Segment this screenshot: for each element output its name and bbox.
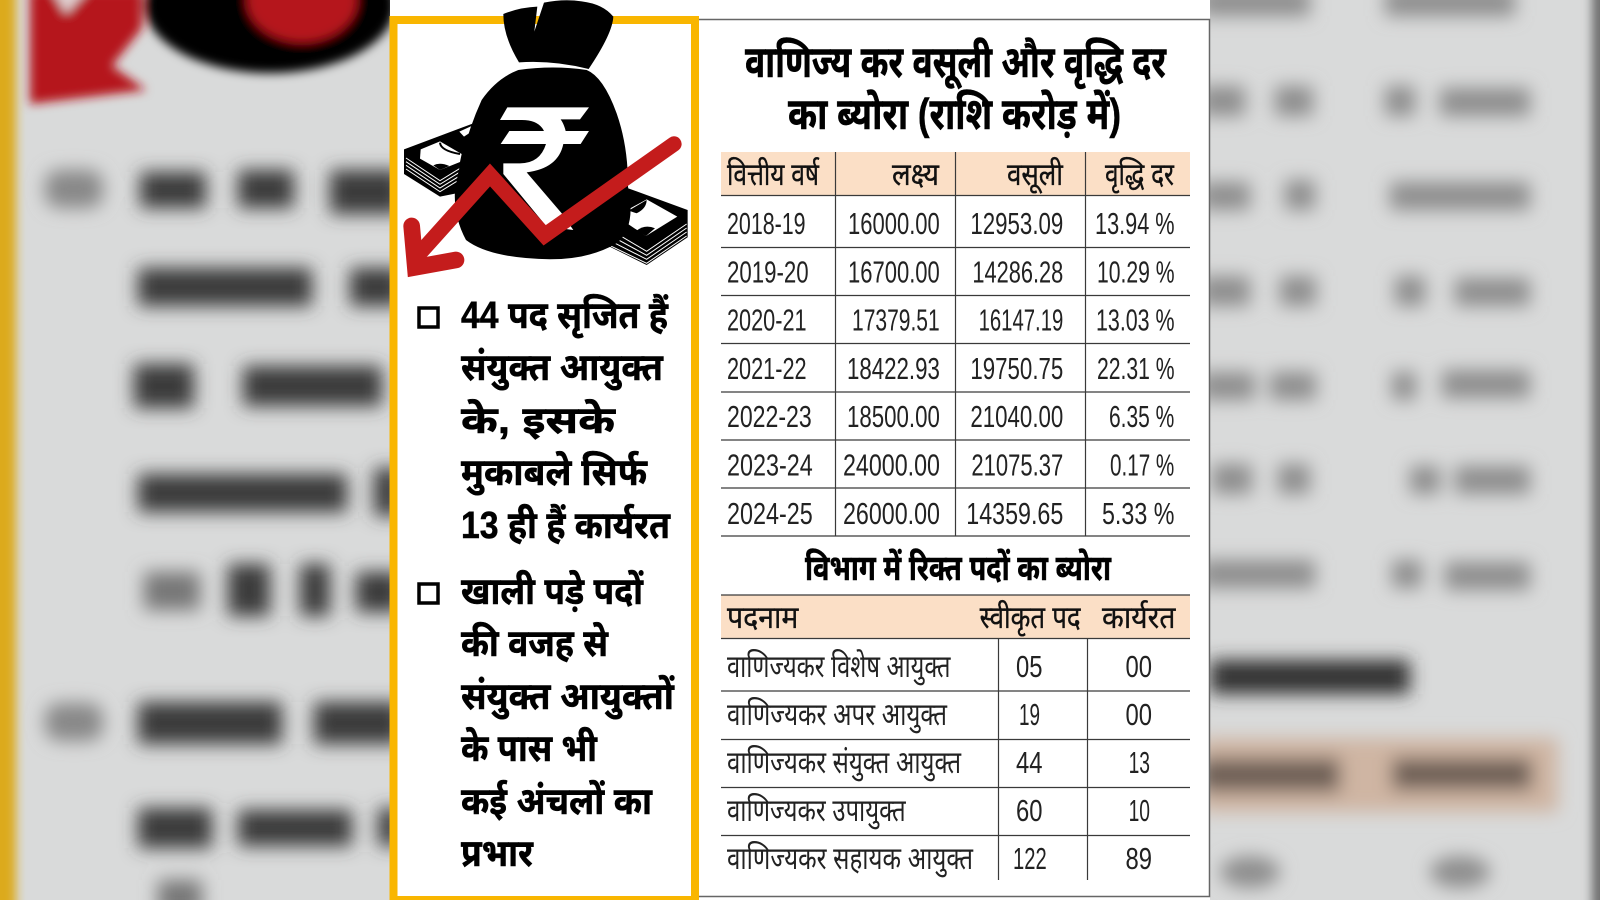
row 2024-25: 2024-25 xyxy=(727,496,813,531)
row: deputy commissioner: वाणिज्यकर उपायुक्त xyxy=(727,793,907,829)
bullet 2: कई अंचलों का xyxy=(461,779,653,823)
table header: लक्ष्य xyxy=(892,157,940,192)
table header xyxy=(721,595,1190,638)
row 2019-20: 2019-20 xyxy=(727,254,809,289)
row 2018-19: 16000.00 xyxy=(848,206,940,241)
row 2022-23: 2022-23 xyxy=(727,399,812,434)
row 2023-24: 0.17 % xyxy=(1110,448,1174,482)
row 2018-19: 2018-19 xyxy=(727,206,806,241)
panel: right table frame xyxy=(698,20,1210,896)
table header: वसूली xyxy=(1007,157,1064,194)
row: special commissioner: 05 xyxy=(1016,649,1042,684)
table header: पदनाम xyxy=(727,600,799,635)
row 2019-20: 10.29 % xyxy=(1097,254,1175,289)
row 2018-19: 13.94 % xyxy=(1095,206,1175,241)
icon: money bag with falling rupee arrow xyxy=(404,0,688,267)
table header: स्वीकृत पद xyxy=(980,600,1081,637)
row 2023-24: 21075.37 xyxy=(971,448,1063,482)
bullet 2: की वजह से xyxy=(461,621,609,665)
row: joint commissioner: 44 xyxy=(1016,745,1042,780)
row 2023-24 xyxy=(727,448,1174,482)
bullet 1 xyxy=(419,293,671,547)
row: assistant commissioner: 122 xyxy=(1013,841,1047,876)
table header: वृद्धि दर xyxy=(1105,157,1175,194)
bullet 1: संयुक्त आयुक्त xyxy=(461,347,664,391)
row: special commissioner: वाणिज्यकर विशेष आयुक्त xyxy=(727,649,952,685)
row 2024-25: 5.33 % xyxy=(1102,496,1174,531)
panel: yellow-framed left column xyxy=(394,20,695,900)
bullet 1: मुकाबले सिर्फ xyxy=(461,450,648,496)
heading: vacant posts: विभाग में रिक्त पदों का ब्योरा xyxy=(805,548,1112,588)
row: additional commissioner: 19 xyxy=(1019,697,1040,732)
bullet 2: खाली पड़े पदों xyxy=(461,569,644,613)
row: special commissioner: 00 xyxy=(1126,649,1152,684)
row: deputy commissioner: 10 xyxy=(1129,793,1150,828)
bullet 1: के, इसके xyxy=(461,398,617,442)
table: revenue collection and growth rate xyxy=(721,152,1190,536)
row: assistant commissioner: वाणिज्यकर सहायक आयुक्त xyxy=(727,841,974,877)
row 2023-24: 2023-24 xyxy=(727,448,813,482)
row 2020-21: 16147.19 xyxy=(979,303,1063,338)
row: joint commissioner: 13 xyxy=(1129,745,1150,780)
row 2021-22: 22.31 % xyxy=(1097,351,1175,386)
row 2019-20: 16700.00 xyxy=(848,254,940,289)
row 2022-23: 21040.00 xyxy=(970,399,1063,434)
bullet 1: 13 ही हैं कार्यरत xyxy=(461,503,671,547)
bullet 2 xyxy=(419,569,675,875)
row: deputy commissioner: 60 xyxy=(1016,793,1042,828)
table: vacant posts in the department xyxy=(721,595,1190,880)
table header: कार्यरत xyxy=(1102,600,1177,635)
row 2020-21: 17379.51 xyxy=(852,303,940,338)
bullet list xyxy=(419,293,675,875)
row 2020-21: 2020-21 xyxy=(727,303,807,338)
icon: left cash stack xyxy=(404,123,490,197)
row 2020-21: 13.03 % xyxy=(1096,303,1175,338)
icon: red zigzag arrow xyxy=(412,144,674,267)
bullet 2: प्रभार xyxy=(461,833,534,875)
row 2021-22 xyxy=(727,351,1175,386)
row: joint commissioner: वाणिज्यकर संयुक्त आयुक्त xyxy=(727,745,962,781)
row 2021-22: 18422.93 xyxy=(847,351,940,386)
row: additional commissioner: वाणिज्यकर अपर आयुक्त xyxy=(727,697,948,733)
title xyxy=(745,37,1167,139)
row 2024-25 xyxy=(727,496,1174,531)
row 2018-19: 12953.09 xyxy=(970,206,1063,241)
row 2018-19 xyxy=(727,206,1175,241)
row 2019-20: 14286.28 xyxy=(972,254,1063,289)
row: additional commissioner xyxy=(727,697,1152,733)
icon: bag body xyxy=(455,67,631,259)
title: का ब्योरा (राशि करोड़ में) xyxy=(788,89,1121,139)
row: deputy commissioner xyxy=(727,793,1150,829)
row: additional commissioner: 00 xyxy=(1126,697,1152,732)
icon: bag neck xyxy=(503,0,613,69)
table header: वित्तीय वर्ष xyxy=(727,157,820,192)
row 2019-20 xyxy=(727,254,1175,289)
row: assistant commissioner: 89 xyxy=(1126,841,1152,876)
row 2023-24: 24000.00 xyxy=(843,448,940,482)
bullet 1: 44 पद सृजित हैं xyxy=(461,293,669,339)
row 2022-23: 18500.00 xyxy=(847,399,940,434)
bullet 2: संयुक्त आयुक्तों xyxy=(461,674,675,720)
table header xyxy=(721,152,1190,195)
row 2021-22: 19750.75 xyxy=(970,351,1063,386)
row: joint commissioner xyxy=(727,745,1150,781)
white sheet behind panels xyxy=(390,0,1210,900)
title: वाणिज्य कर वसूली और वृद्धि दर xyxy=(745,37,1167,90)
row 2022-23: 6.35 % xyxy=(1109,399,1174,434)
row 2024-25: 14359.65 xyxy=(966,496,1063,531)
row: special commissioner xyxy=(727,649,1152,685)
icon: rupee symbol xyxy=(500,107,589,230)
bullet 2: के पास भी xyxy=(461,726,598,770)
row 2021-22: 2021-22 xyxy=(727,351,807,386)
row 2024-25: 26000.00 xyxy=(843,496,940,531)
row 2020-21 xyxy=(727,303,1175,338)
icon: right cash stack xyxy=(608,188,688,265)
row 2022-23 xyxy=(727,399,1174,434)
